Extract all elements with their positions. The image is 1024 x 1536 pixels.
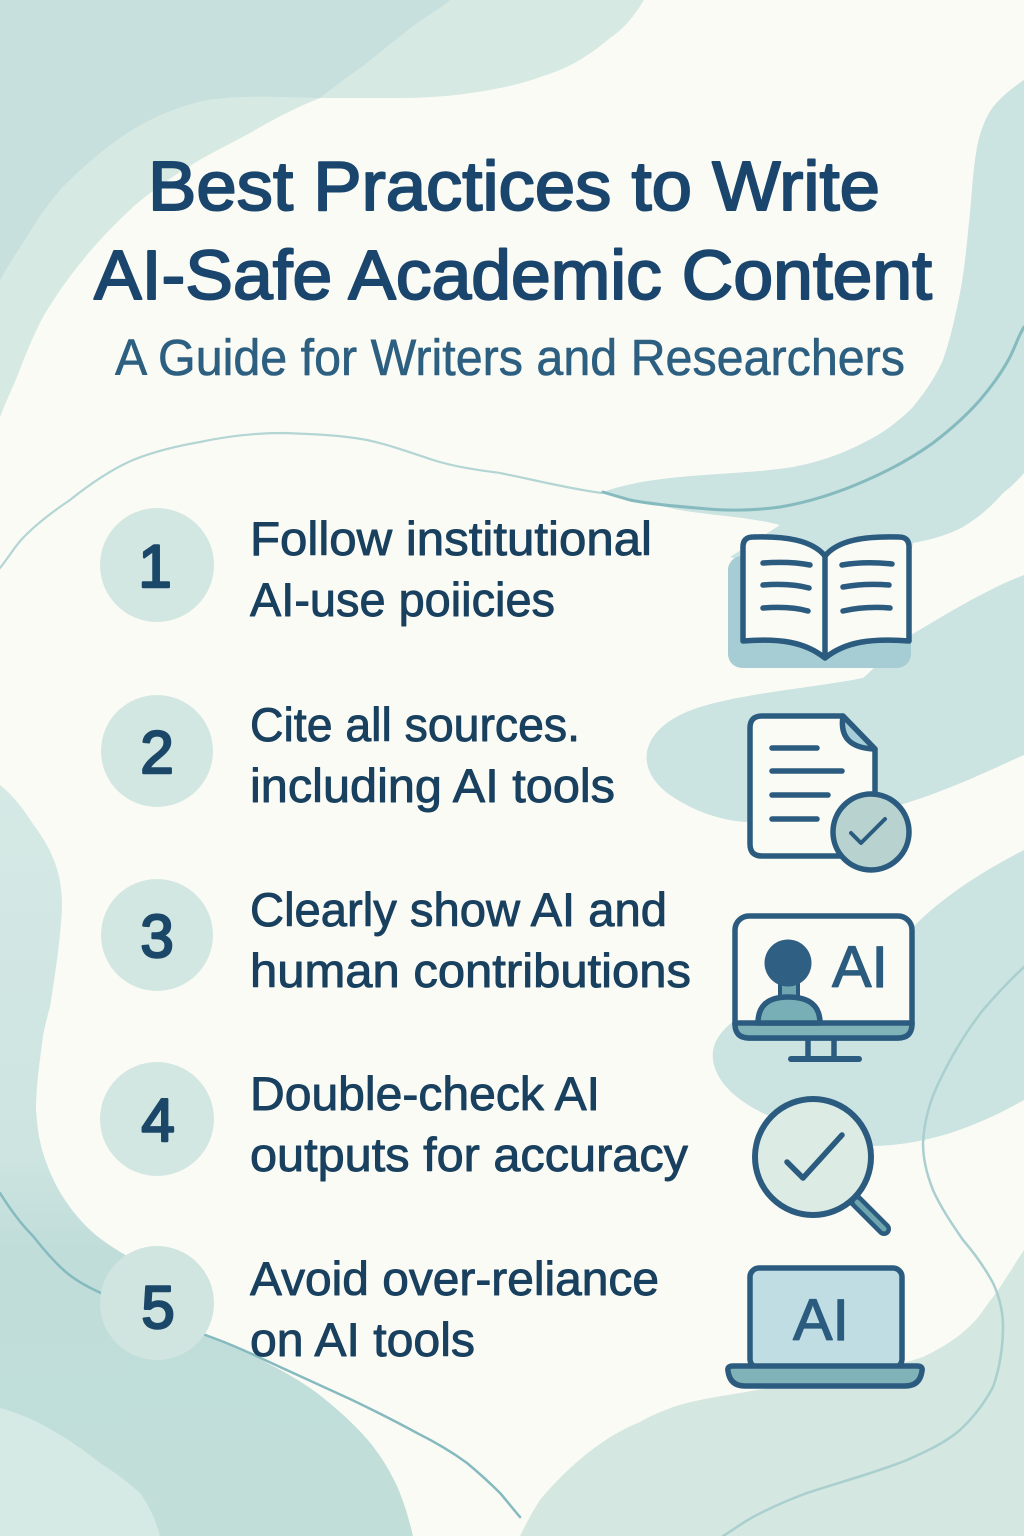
icon: laptop with AI: AI	[793, 1288, 849, 1353]
number badge 4: 4	[141, 1087, 175, 1154]
number badge 2: 2	[140, 719, 174, 786]
item 4 text: Double-check AI	[250, 1067, 600, 1120]
background: middle right blob	[647, 575, 1024, 822]
item 3 text: Clearly show AI and	[250, 883, 667, 936]
item 2 text: including AI tools	[250, 759, 615, 812]
item 5 text: Avoid over-reliance	[250, 1252, 659, 1305]
item 5 text	[250, 1252, 659, 1366]
item 4	[100, 1062, 884, 1229]
title: AI-Safe Academic Content	[94, 236, 932, 314]
item 2 text: Cite all sources.	[250, 698, 580, 751]
subtitle: A Guide for Writers and Researchers	[115, 329, 905, 386]
item 5 text: on AI tools	[250, 1313, 475, 1366]
title	[94, 147, 932, 314]
background: bottom left lighter patch	[0, 1408, 160, 1536]
number badge 4	[100, 1062, 214, 1176]
number badge 1: 1	[138, 533, 172, 600]
item 1	[100, 508, 911, 668]
background: top-left light wave	[0, 0, 644, 417]
number badge 1	[100, 508, 214, 622]
item 3 text	[250, 883, 691, 997]
number badge 3	[101, 879, 213, 991]
number badge 5: 5	[141, 1274, 175, 1341]
item 3	[101, 879, 912, 1059]
background: thin curves	[0, 327, 1024, 1536]
background: lower right blob	[713, 850, 1024, 1146]
icon: monitor with person and AI: AI	[832, 935, 888, 1000]
icon: open book	[728, 537, 911, 668]
icon: laptop with AI	[728, 1268, 922, 1386]
item 4 text: outputs for accuracy	[250, 1128, 689, 1181]
icon: monitor with person and AI	[735, 916, 912, 1059]
title: Best Practices to Write	[148, 147, 880, 225]
item 5	[100, 1246, 922, 1386]
item 1 text: AI-use poiicies	[250, 573, 555, 626]
item 2 text	[250, 698, 615, 812]
icon: document with check	[750, 716, 909, 870]
item 2	[101, 695, 909, 870]
background: left blob	[0, 785, 413, 1536]
background: top-left darker wave	[0, 0, 450, 280]
number badge 2	[101, 695, 213, 807]
number badge 3: 3	[140, 903, 174, 970]
background: bottom right blob	[520, 1250, 1024, 1536]
icon: magnifier with check	[755, 1099, 884, 1229]
item 1 text: Follow institutional	[250, 512, 652, 565]
item 4 text	[250, 1067, 689, 1181]
item 3 text: human contributions	[250, 944, 691, 997]
item 1 text	[250, 512, 652, 626]
number badge 5	[100, 1246, 214, 1360]
background: upper right blob	[603, 80, 1024, 600]
